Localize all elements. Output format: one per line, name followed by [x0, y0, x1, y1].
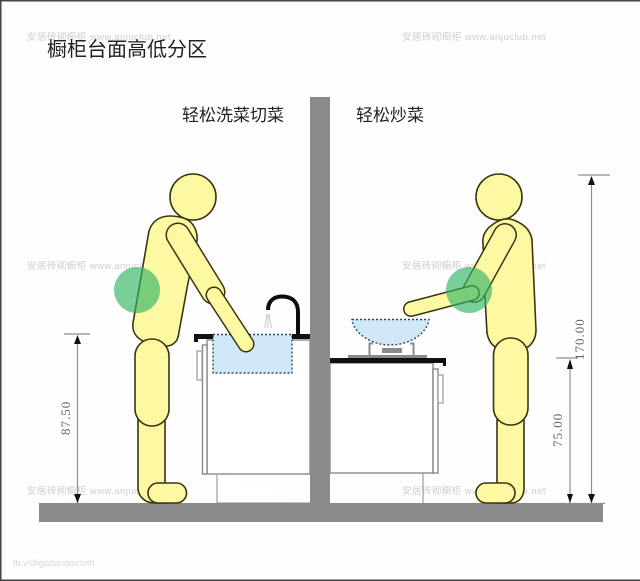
countertop: [330, 358, 446, 366]
cabinet handle: [438, 375, 443, 403]
center wall and floor: [39, 97, 603, 522]
pot stands: [370, 344, 414, 356]
dimension 75.00: [550, 358, 605, 504]
right cabinet with stove: [330, 320, 446, 503]
wok: [352, 320, 429, 345]
burner: [382, 348, 402, 353]
watermarks: tb.v/diigodandiscloth: [13, 558, 95, 568]
forearm: [214, 295, 246, 344]
torso: [483, 219, 536, 348]
cabinet plinth: [217, 474, 310, 503]
watermarks: 安居砖砌橱柜 www.anjuclub.net: [27, 31, 171, 43]
torso: [133, 216, 197, 346]
watermarks: 安居砖砌橱柜 www.anjuclub.net: [27, 485, 171, 497]
cabinet body: [330, 363, 433, 473]
countertop: [194, 334, 310, 342]
water spray: [265, 314, 272, 328]
lower leg: [497, 420, 524, 503]
cabinet door edge: [202, 345, 207, 474]
head: [170, 174, 216, 220]
forearm: [411, 293, 472, 309]
dimension 87.50: [58, 334, 90, 504]
thigh: [135, 339, 169, 426]
upper arm: [474, 235, 505, 291]
dimension 75.00: 75.00: [550, 413, 565, 447]
thigh: [494, 338, 528, 425]
watermarks: [13, 31, 546, 568]
foot: [476, 483, 515, 503]
left heading: 轻松洗菜切菜: [182, 106, 284, 125]
right figure: [411, 174, 536, 503]
stove base: [348, 355, 427, 358]
green zone: [446, 267, 492, 313]
green zone: [114, 267, 160, 313]
dimension 170.00: 170.00: [572, 318, 587, 360]
sink basin: [213, 334, 292, 373]
watermarks: 安居砖砌橱柜 www.anjuclub.net: [27, 260, 171, 272]
dimension 87.50: 87.50: [58, 401, 73, 435]
cabinet door edge: [433, 369, 438, 473]
cabinet plinth: [422, 473, 424, 503]
left cabinet with sink: [194, 296, 310, 503]
cabinet handle: [197, 351, 202, 380]
watermarks: 安居砖砌橱柜 www.anjuclub.net: [402, 31, 546, 43]
watermarks: 安居砖砌橱柜 www.anjuclub.net: [402, 260, 546, 272]
title: 橱柜台面高低分区: [47, 38, 207, 61]
head: [476, 174, 522, 220]
foot: [148, 483, 186, 503]
dimension 170.00: [572, 175, 610, 503]
watermarks: 安居砖砌橱柜 www.anjuclub.net: [402, 485, 546, 497]
faucet: [268, 296, 298, 335]
right heading: 轻松炒菜: [356, 106, 424, 125]
left figure: [114, 174, 246, 503]
cabinet body: [207, 340, 310, 474]
lower leg: [138, 420, 165, 503]
upper arm: [178, 235, 213, 292]
